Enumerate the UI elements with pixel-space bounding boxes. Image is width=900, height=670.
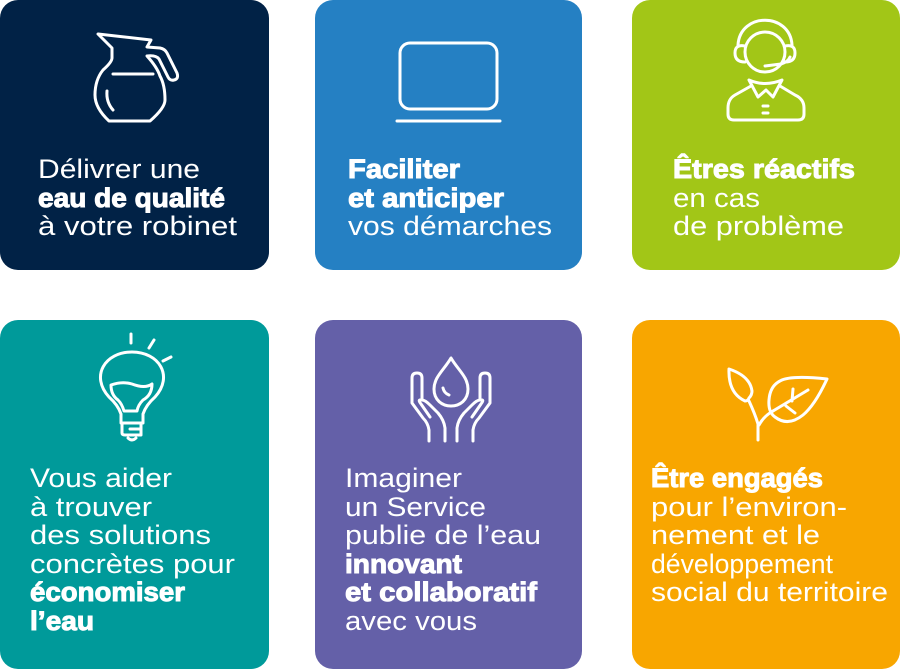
text: collaborative service: et collaboratif (345, 577, 538, 607)
text: saving water: l’eau (30, 606, 94, 636)
text: collaborative service: innovant (345, 549, 462, 579)
panel: saving water (0, 320, 269, 669)
text: saving water: des solutions (30, 520, 211, 550)
text: responsiveness: Êtres réactifs (673, 153, 855, 184)
text: saving water: à trouver (30, 492, 152, 522)
panel: water quality (0, 0, 269, 270)
text: responsiveness: de problème (673, 211, 844, 241)
icon: laptop (397, 43, 500, 121)
icon: headset agent (728, 20, 804, 120)
text: procedures: et anticiper (348, 183, 505, 213)
text: water quality: à votre robinet (38, 211, 238, 241)
text: saving water (30, 463, 235, 636)
panel: collaborative service (315, 320, 582, 669)
text: environment: développement (651, 549, 833, 579)
text: saving water: concrètes pour (30, 549, 235, 579)
text: environment: Être engagés (651, 462, 823, 493)
icon: light bulb (100, 334, 171, 440)
text: saving water: économiser (30, 577, 185, 607)
panel: responsiveness (632, 0, 900, 270)
text: environment: nement et le (651, 520, 820, 550)
text: environment: pour l’environ- (651, 492, 847, 522)
text: environment (651, 462, 888, 607)
text: water quality (38, 154, 238, 241)
text: responsiveness (673, 153, 855, 241)
text: collaborative service (345, 463, 541, 636)
icon: jug (95, 34, 178, 121)
text: procedures: vos démarches (348, 211, 552, 241)
text: procedures (348, 154, 552, 241)
text: collaborative service: un Service (345, 492, 486, 522)
text: environment: social du territoire (651, 577, 888, 607)
text: responsiveness: en cas (673, 183, 760, 213)
icon: hands holding drop (412, 358, 490, 441)
text: procedures: Faciliter (348, 154, 461, 184)
panel: procedures (315, 0, 582, 270)
text: collaborative service: avec vous (345, 606, 477, 636)
text: collaborative service: Imaginer (345, 463, 462, 493)
panel: environment (632, 320, 900, 669)
text: collaborative service: publie de l’eau (345, 520, 541, 550)
text: saving water: Vous aider (30, 463, 172, 493)
text: water quality: Délivrer une (38, 154, 200, 184)
text: water quality: eau de qualité (38, 183, 225, 213)
icon: leaves (729, 369, 827, 440)
